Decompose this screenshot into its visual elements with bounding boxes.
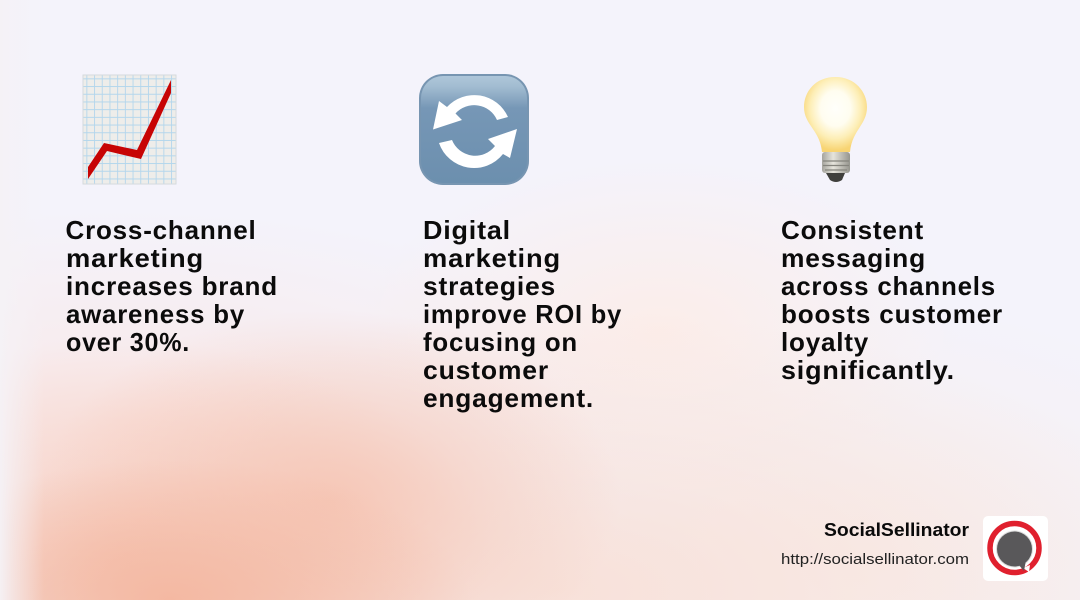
brand url: http://socialsellinator.com <box>781 551 969 568</box>
panel: consistent messaging text <box>781 215 1003 385</box>
panel: cross-channel text: increases brand <box>66 271 278 301</box>
panel: cross-channel text <box>66 215 278 357</box>
panel: digital marketing text: marketing <box>423 243 561 273</box>
panel: cross-channel text: over 30%. <box>66 327 190 357</box>
panel: consistent messaging text: Consistent <box>781 215 924 245</box>
icon: arrows refresh button <box>419 74 529 185</box>
brand name: SocialSellinator <box>824 520 969 540</box>
panel: digital marketing text: improve ROI by <box>423 299 622 329</box>
panel: digital marketing text: customer <box>423 355 549 385</box>
panel: consistent messaging text: across channels <box>781 271 996 301</box>
panel: digital marketing text: focusing on <box>423 327 578 357</box>
panel: digital marketing text: strategies <box>423 271 556 301</box>
icon: light bulb <box>804 77 867 182</box>
panel: digital marketing text: Digital <box>423 215 511 245</box>
panel: digital marketing text <box>423 215 622 413</box>
panel: consistent messaging text: loyalty <box>781 327 869 357</box>
panel: cross-channel text: marketing <box>66 243 204 273</box>
panel: consistent messaging text: boosts customer <box>781 299 1003 329</box>
panel: consistent messaging text: significantly. <box>781 355 955 385</box>
panel: cross-channel text: Cross-channel <box>66 215 256 245</box>
icon: chart with upward trend <box>83 75 176 184</box>
panel: cross-channel text: awareness by <box>66 299 245 329</box>
logo <box>983 516 1048 581</box>
panel: digital marketing text: engagement. <box>423 383 594 413</box>
panel: consistent messaging text: messaging <box>781 243 926 273</box>
